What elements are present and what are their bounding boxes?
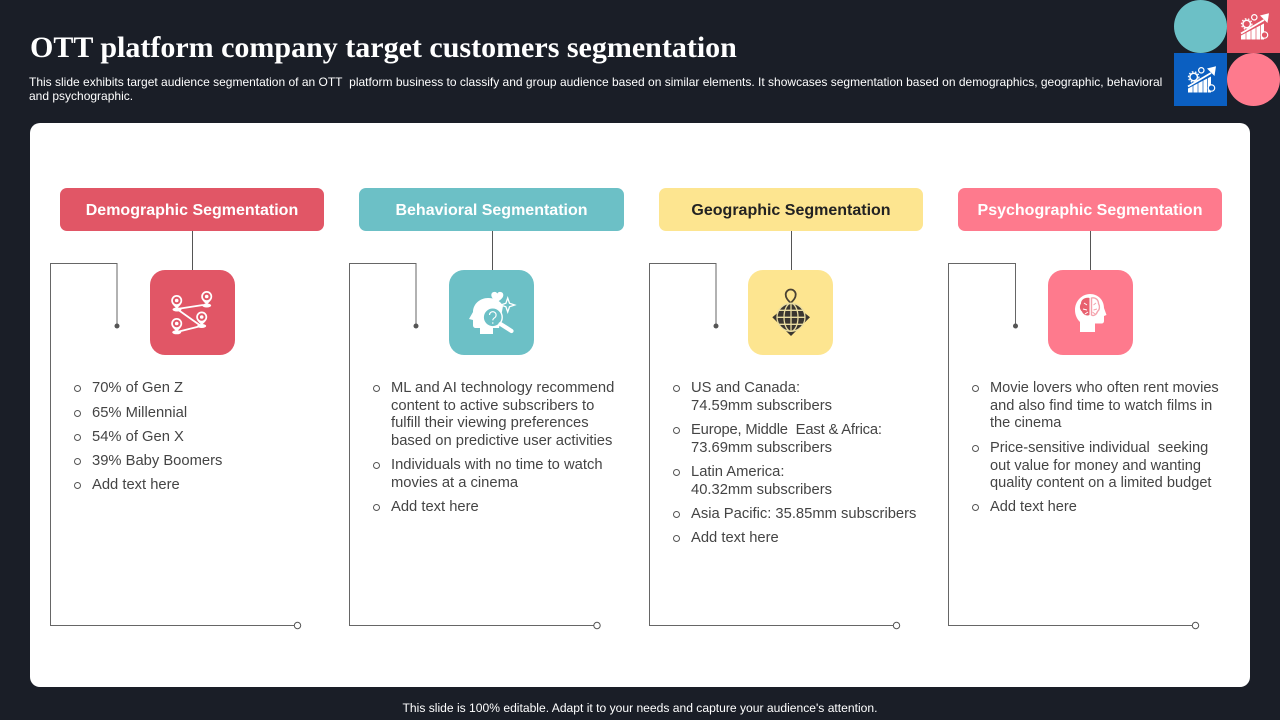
icon: head with question magnifier [449, 270, 534, 355]
heading: Behavioral Segmentation [395, 202, 588, 219]
heading [958, 188, 1222, 231]
bullet list: 39% Baby Boomers [92, 453, 222, 469]
subtitle description: This slide exhibits target audience segmentation of an OTT platform business to classify and group audience based on similar elements. It showcases segmentation based on demographics, geographic, behavioral [29, 75, 1162, 89]
icon: connected map pins [150, 270, 235, 355]
bullet list: Individuals with no time to watch [391, 457, 603, 473]
bullet list: fulfill their viewing preferences [391, 415, 589, 431]
heading [359, 188, 624, 231]
bullet list: Price-sensitive individual seeking [990, 440, 1208, 456]
bullet list: Add text here [391, 499, 479, 515]
panel: psychographic segmentation [948, 188, 1222, 630]
bullet list: 40.32mm subscribers [691, 482, 832, 498]
bullet list [74, 380, 222, 493]
decorative corner tiles [1174, 0, 1280, 106]
bullet list: Asia Pacific: 35.85mm subscribers [691, 506, 916, 522]
bullet list: US and Canada: [691, 380, 800, 396]
bullet list: 65% Millennial [92, 405, 187, 421]
bullet list: based on predictive user activities [391, 433, 612, 449]
icon: globe with pin [748, 270, 833, 355]
heading: Geographic Segmentation [691, 202, 891, 219]
subtitle description [29, 75, 1162, 103]
bullet list: movies at a cinema [391, 475, 518, 491]
bullet list: quality content on a limited budget [990, 475, 1212, 491]
heading: Psychographic Segmentation [978, 202, 1202, 219]
bullet list: the cinema [990, 415, 1061, 431]
bullet list: 70% of Gen Z [92, 380, 183, 396]
panel: demographic segmentation [50, 188, 324, 630]
subtitle description: and psychographic. [29, 89, 133, 103]
panel: behavioral segmentation [349, 188, 624, 630]
bullet list: ML and AI technology recommend [391, 380, 614, 396]
bullet list: Latin America: [691, 464, 784, 480]
bullet list: Add text here [92, 477, 180, 493]
heading: Demographic Segmentation [86, 202, 298, 219]
bullet list: Add text here [990, 499, 1077, 515]
bullet list [673, 380, 916, 546]
bullet list: Movie lovers who often rent movies [990, 380, 1219, 396]
bullet list: 73.69mm subscribers [691, 440, 832, 456]
bullet list: content to active subscribers to [391, 398, 594, 414]
footer note: This slide is 100% editable. Adapt it to your needs and capture your audience's attention. [403, 701, 877, 715]
title: OTT platform company target customers segmentation [30, 31, 737, 64]
bullet list: out value for money and wanting [990, 458, 1201, 474]
bullet list [972, 380, 1219, 515]
bullet list: Europe, Middle East & Africa: [691, 422, 882, 438]
icon: head with brain [1048, 270, 1133, 355]
bullet list: Add text here [691, 530, 779, 546]
white content card [30, 123, 1250, 687]
bullet list: 54% of Gen X [92, 429, 184, 445]
bullet list [373, 380, 614, 515]
bullet list: and also find time to watch films in [990, 398, 1212, 414]
bullet list: 74.59mm subscribers [691, 398, 832, 414]
heading [60, 188, 324, 231]
panel: geographic segmentation [649, 188, 923, 630]
heading [659, 188, 923, 231]
